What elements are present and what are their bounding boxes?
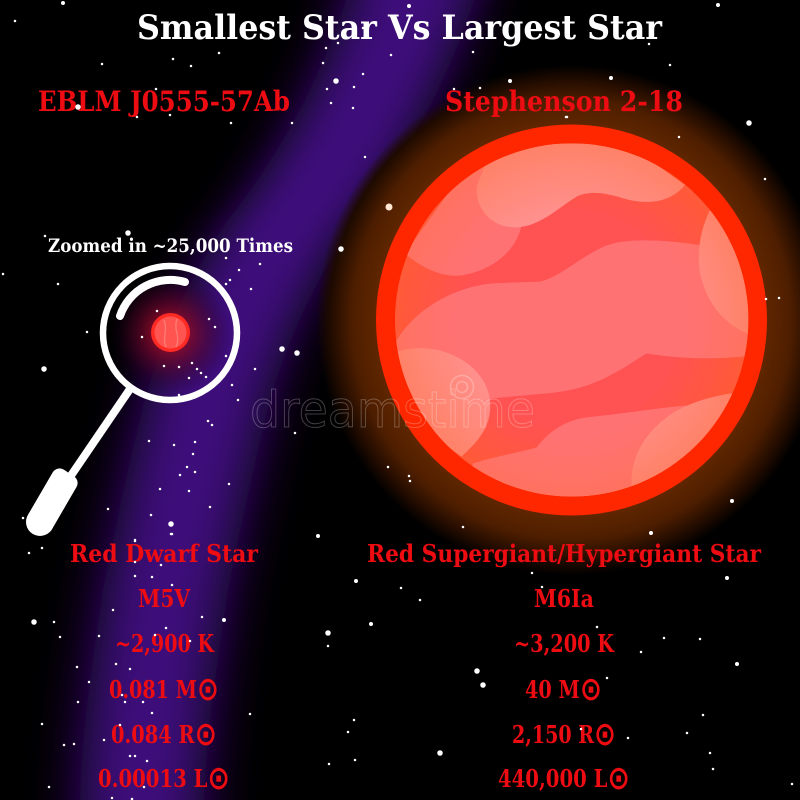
lens red glow — [110, 273, 230, 393]
tiny red dwarf star — [151, 313, 190, 352]
watermark: dreamstime: dreamstime — [250, 381, 535, 439]
star surface bands — [395, 143, 748, 497]
illustration: Stephenson 2-18 star — [376, 124, 767, 516]
luminosity: 440,000 L — [498, 764, 632, 793]
label: zoom factor: Zoomed in ~25,000 Times — [48, 235, 293, 257]
mass: 0.081 M — [109, 675, 219, 704]
temperature: ~3,200 K — [514, 629, 615, 658]
handle shaft — [68, 389, 130, 480]
stats: largest star — [367, 539, 761, 797]
title: Smallest Star Vs Largest Star — [137, 8, 663, 48]
temperature: ~2,900 K — [115, 629, 215, 658]
background: purple milky way band — [80, 0, 474, 800]
icon: magnifying glass with tiny red dwarf — [35, 266, 237, 525]
star type: Red Dwarf Star — [70, 539, 258, 568]
lens stars — [142, 311, 226, 395]
radius: ⊙ — [594, 714, 616, 753]
lens highlight — [120, 280, 185, 316]
lens ring — [103, 266, 237, 400]
luminosity: ⊙ — [207, 758, 230, 797]
spectral class: M5V — [138, 584, 190, 613]
luminosity: 0.00013 L — [98, 764, 232, 793]
mass: 40 M — [525, 675, 593, 704]
radius: 0.084 R — [111, 720, 214, 749]
radius: 2,150 R — [512, 720, 615, 749]
star outer rim — [376, 124, 767, 516]
star type: Red Supergiant/Hypergiant Star — [367, 539, 761, 568]
spectral class: M6Ia — [534, 584, 594, 613]
stats: smallest star — [70, 539, 258, 797]
heading: smallest star name: EBLM J0555-57Ab — [38, 85, 290, 118]
star glow: orange halo around Stephenson 2-18 — [316, 65, 800, 575]
handle grip — [35, 476, 70, 525]
heading: largest star name: Stephenson 2-18 — [445, 85, 683, 118]
radius: ⊙ — [195, 714, 217, 753]
mass: ⊙ — [197, 669, 219, 708]
luminosity: ⊙ — [607, 758, 630, 797]
mass: ⊙ — [580, 669, 602, 708]
